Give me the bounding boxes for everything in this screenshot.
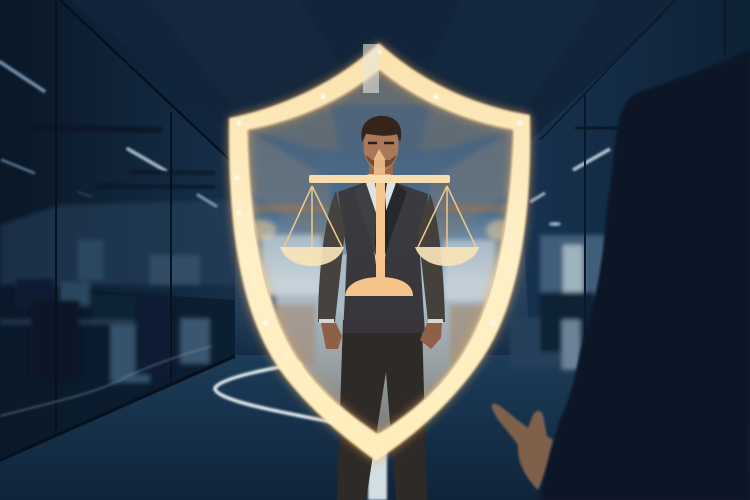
sleeves — [318, 191, 345, 322]
dark reflected ceiling bands — [12, 127, 215, 187]
glass frame lines — [0, 0, 235, 460]
reflected swoosh — [0, 346, 212, 416]
hand — [492, 404, 553, 490]
right pan and strings — [415, 186, 479, 266]
scales of justice — [280, 149, 479, 296]
neck — [369, 160, 393, 182]
shield ring — [229, 43, 530, 461]
lapels — [354, 183, 380, 262]
shirt — [366, 181, 396, 265]
left glass wall — [0, 0, 235, 462]
beam — [309, 175, 450, 183]
legs — [337, 320, 427, 500]
right glass wall — [510, 0, 750, 420]
base — [345, 277, 413, 296]
cuffs and hands — [319, 319, 443, 349]
shield interior: blurred office seen through glass — [248, 70, 513, 434]
top ceiling light through shield — [363, 44, 379, 93]
floor swoosh line — [215, 358, 340, 422]
beard shadow — [366, 155, 396, 168]
head — [364, 121, 398, 171]
pillar — [376, 183, 385, 279]
tie — [375, 183, 389, 262]
hair — [361, 116, 401, 142]
ceiling lights on glass — [0, 62, 216, 206]
jacket torso — [338, 182, 428, 333]
floor — [0, 355, 750, 500]
left pan and strings — [280, 186, 344, 266]
light gaps between arms and torso — [336, 255, 427, 312]
center floor light strip — [368, 432, 387, 500]
foreground person from behind — [492, 50, 750, 500]
businessman — [318, 116, 445, 500]
shield studs — [234, 50, 522, 326]
finial arrow — [367, 149, 391, 187]
eyes — [368, 142, 394, 144]
shield glow — [229, 43, 530, 461]
